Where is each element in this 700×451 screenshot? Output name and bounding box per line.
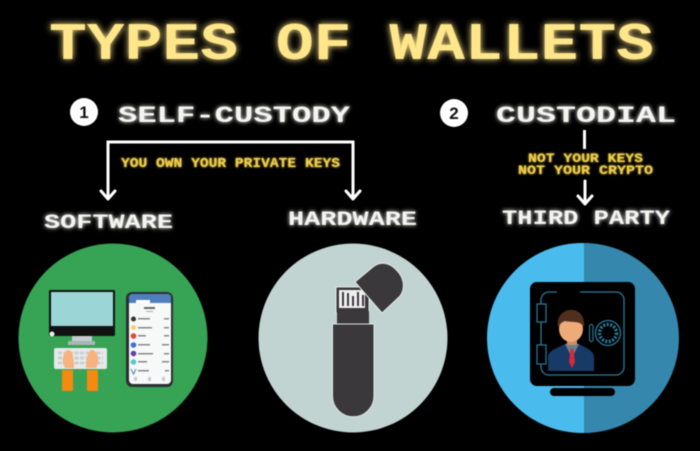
caption: not your keys, not your crypto: NOT YOUR CRYPTO (518, 164, 654, 178)
section 2 number badge (440, 99, 468, 127)
icon: smartphone wallet app (126, 292, 173, 387)
heading: self-custody: SELF-CUSTODY (118, 103, 350, 129)
icon: usb cap (355, 263, 403, 313)
arrow: self-custody branching to software and hardware (101, 142, 360, 199)
panel: hardware wallet illustration (258, 244, 448, 432)
heading: custodial: CUSTODIAL (496, 103, 676, 129)
section 1 number badge (70, 98, 98, 126)
arrow: down to third party (578, 181, 592, 204)
icon: safe (530, 282, 635, 396)
label: hardware: HARDWARE (288, 209, 417, 232)
label: software: SOFTWARE (44, 212, 173, 235)
panel: third party custodial illustration (487, 243, 679, 433)
icon: keyboard with typing hands (54, 348, 107, 391)
title: TYPES OF WALLETS (49, 15, 654, 75)
caption: you own your private keys: YOU OWN YOUR PRIVATE KEYS (121, 157, 340, 172)
icon: usb stick body and connector (332, 287, 374, 417)
label: third party: THIRD PARTY (502, 208, 671, 231)
section 1 number badge: 1 (79, 103, 89, 122)
section 2 number badge: 2 (449, 104, 459, 123)
caption: not your keys, not your crypto (518, 152, 654, 178)
icon: person in suit (548, 310, 594, 371)
panel: software wallet illustration (18, 244, 208, 432)
divider line above caption (583, 130, 586, 149)
icon: desktop monitor (49, 290, 115, 345)
caption: not your keys, not your crypto: NOT YOUR KEYS (528, 152, 644, 166)
